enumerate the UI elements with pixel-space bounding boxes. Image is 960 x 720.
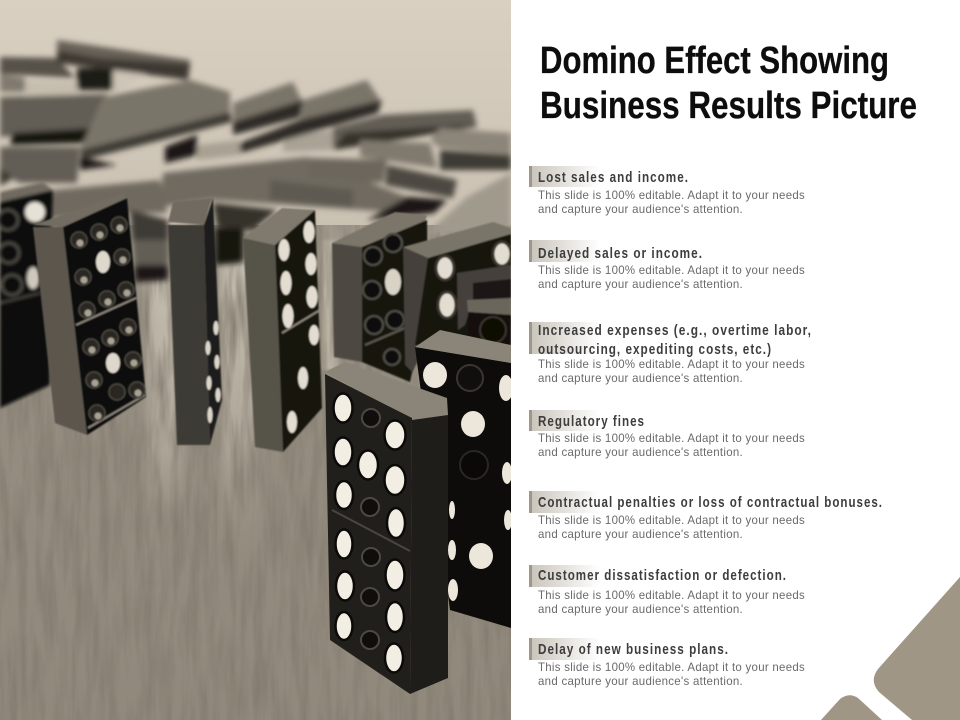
item 6: customer dissatisfaction — [529, 565, 805, 616]
item 6: customer dissatisfaction: This slide is 100% editable. Adapt it to your needs — [538, 588, 805, 602]
title — [540, 40, 917, 127]
domino 1 (far left) — [0, 182, 53, 408]
domino 5 — [332, 212, 428, 382]
item 2: delayed sales or income: Delayed sales or income. — [538, 245, 703, 262]
item 1: lost sales and income: and capture your audience's attention. — [538, 202, 743, 216]
item 7: delay of new business plans: and capture your audience's attention. — [538, 674, 743, 688]
photo: black dominoes standing in a curved row on a wooden table — [0, 0, 513, 720]
item 4: regulatory fines: Regulatory fines — [538, 413, 645, 430]
item 4: regulatory fines: and capture your audience's attention. — [538, 445, 743, 459]
title: Domino Effect Showing — [540, 40, 889, 82]
item 5: contractual penalties — [529, 491, 883, 541]
item 1: lost sales and income — [529, 166, 805, 216]
item 7: delay of new business plans: Delay of new business plans. — [538, 641, 729, 658]
item 1: lost sales and income: Lost sales and income. — [538, 169, 689, 186]
domino 7 (large, right) — [415, 330, 513, 628]
item 6: customer dissatisfaction: Customer dissatisfaction or defection. — [538, 567, 787, 584]
item 4: regulatory fines — [529, 410, 805, 459]
item 2: delayed sales or income: and capture your audience's attention. — [538, 277, 743, 291]
item 1: lost sales and income: This slide is 100% editable. Adapt it to your needs — [538, 188, 805, 202]
domino 2 — [33, 194, 146, 435]
decorative small diamond, bottom edge — [821, 695, 882, 720]
item 5: contractual penalties: This slide is 100% editable. Adapt it to your needs — [538, 513, 805, 527]
item 7: delay of new business plans — [529, 638, 805, 688]
item 3: increased expenses: This slide is 100% editable. Adapt it to your needs — [538, 357, 805, 371]
domino 4 — [243, 208, 322, 452]
item 7: delay of new business plans: This slide is 100% editable. Adapt it to your needs — [538, 660, 805, 674]
item 2: delayed sales or income — [529, 240, 805, 291]
domino 6 — [403, 222, 511, 372]
item 2: delayed sales or income: This slide is 100% editable. Adapt it to your needs — [538, 263, 805, 277]
item 3: increased expenses — [529, 322, 812, 385]
domino 8 (front) — [325, 362, 448, 694]
item 3: increased expenses: and capture your audience's attention. — [538, 371, 743, 385]
decorative large diamond, bottom right — [874, 577, 960, 720]
item 3: increased expenses: outsourcing, expediting costs, etc.) — [538, 341, 772, 358]
domino 3 (edge on) — [168, 198, 222, 445]
item 4: regulatory fines: This slide is 100% editable. Adapt it to your needs — [538, 431, 805, 445]
item 5: contractual penalties: and capture your audience's attention. — [538, 527, 743, 541]
item 6: customer dissatisfaction: and capture your audience's attention. — [538, 602, 743, 616]
item 3: increased expenses: Increased expenses (e.g., overtime labor, — [538, 322, 812, 339]
